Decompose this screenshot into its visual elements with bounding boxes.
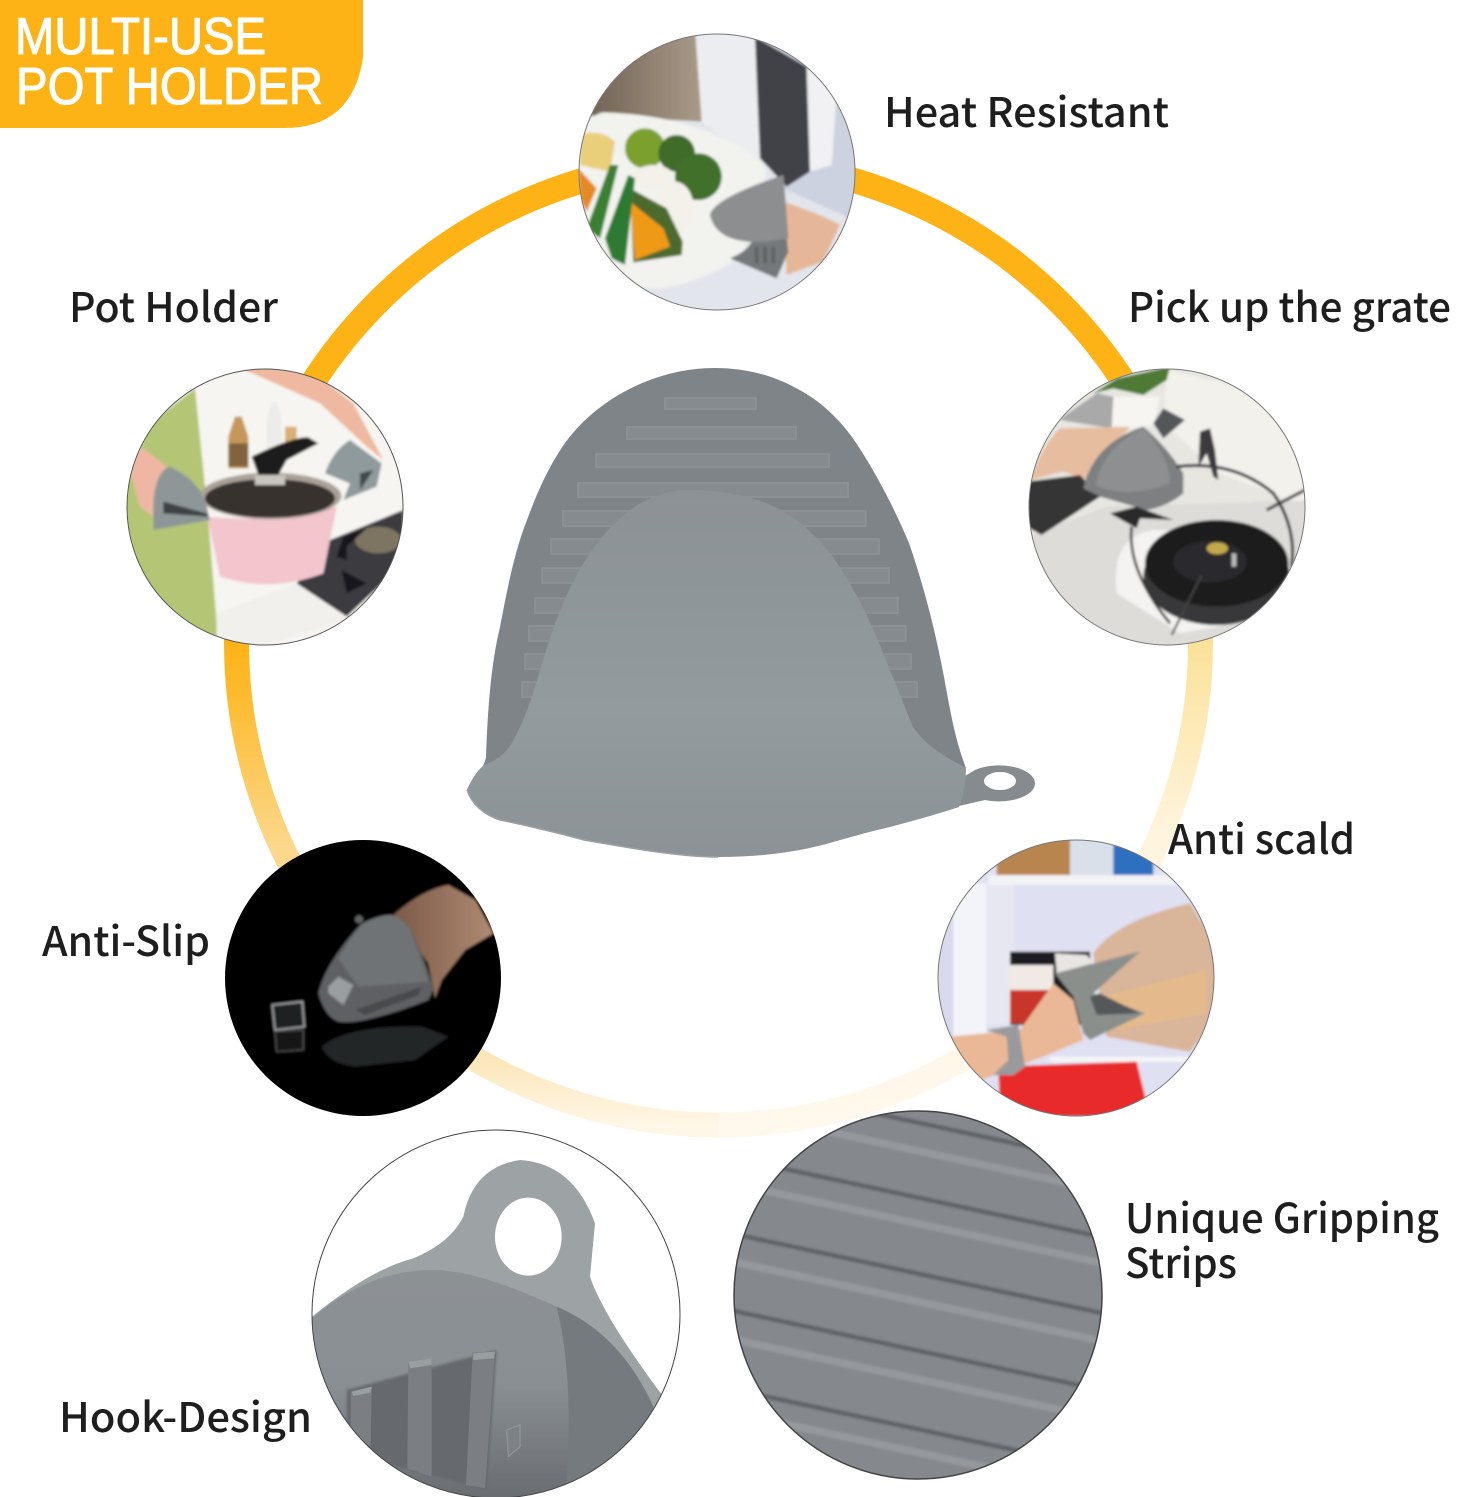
photo: anti-slip on black	[225, 840, 501, 1116]
photo: hook design close-up	[312, 1130, 680, 1497]
badge: multi-use pot holder: MULTI-USE	[15, 8, 266, 66]
photo: gripping strips close-up	[733, 1110, 1103, 1480]
label: unique gripping strips: Strips	[1125, 1230, 1237, 1290]
label: pot holder: Pot Holder	[69, 274, 278, 334]
photo: pick up the grate, gas stove	[1028, 368, 1306, 646]
badge: multi-use pot holder	[0, 0, 363, 128]
label: unique gripping strips: Unique Gripping	[1125, 1185, 1439, 1245]
main product: grey silicone pot holder	[467, 368, 1035, 857]
label: pick up the grate: Pick up the grate	[1128, 274, 1451, 334]
mitt back with ridges	[467, 368, 966, 857]
badge: multi-use pot holder: POT HOLDER	[16, 58, 323, 116]
orange ring	[236, 161, 1200, 1125]
label: unique gripping strips	[1125, 1185, 1439, 1290]
hanging loop	[950, 765, 1035, 808]
label: anti scald: Anti scald	[1168, 806, 1355, 866]
front flap	[467, 490, 966, 857]
photo: heat resistant, plate and microwave	[578, 34, 856, 310]
label: hook-design: Hook-Design	[59, 1384, 312, 1444]
photo: pot holder, pink pot	[126, 368, 404, 646]
label: anti-slip: Anti-Slip	[42, 908, 210, 968]
label: heat resistant: Heat Resistant	[884, 79, 1169, 139]
photo: anti scald, fridge	[938, 840, 1214, 1116]
